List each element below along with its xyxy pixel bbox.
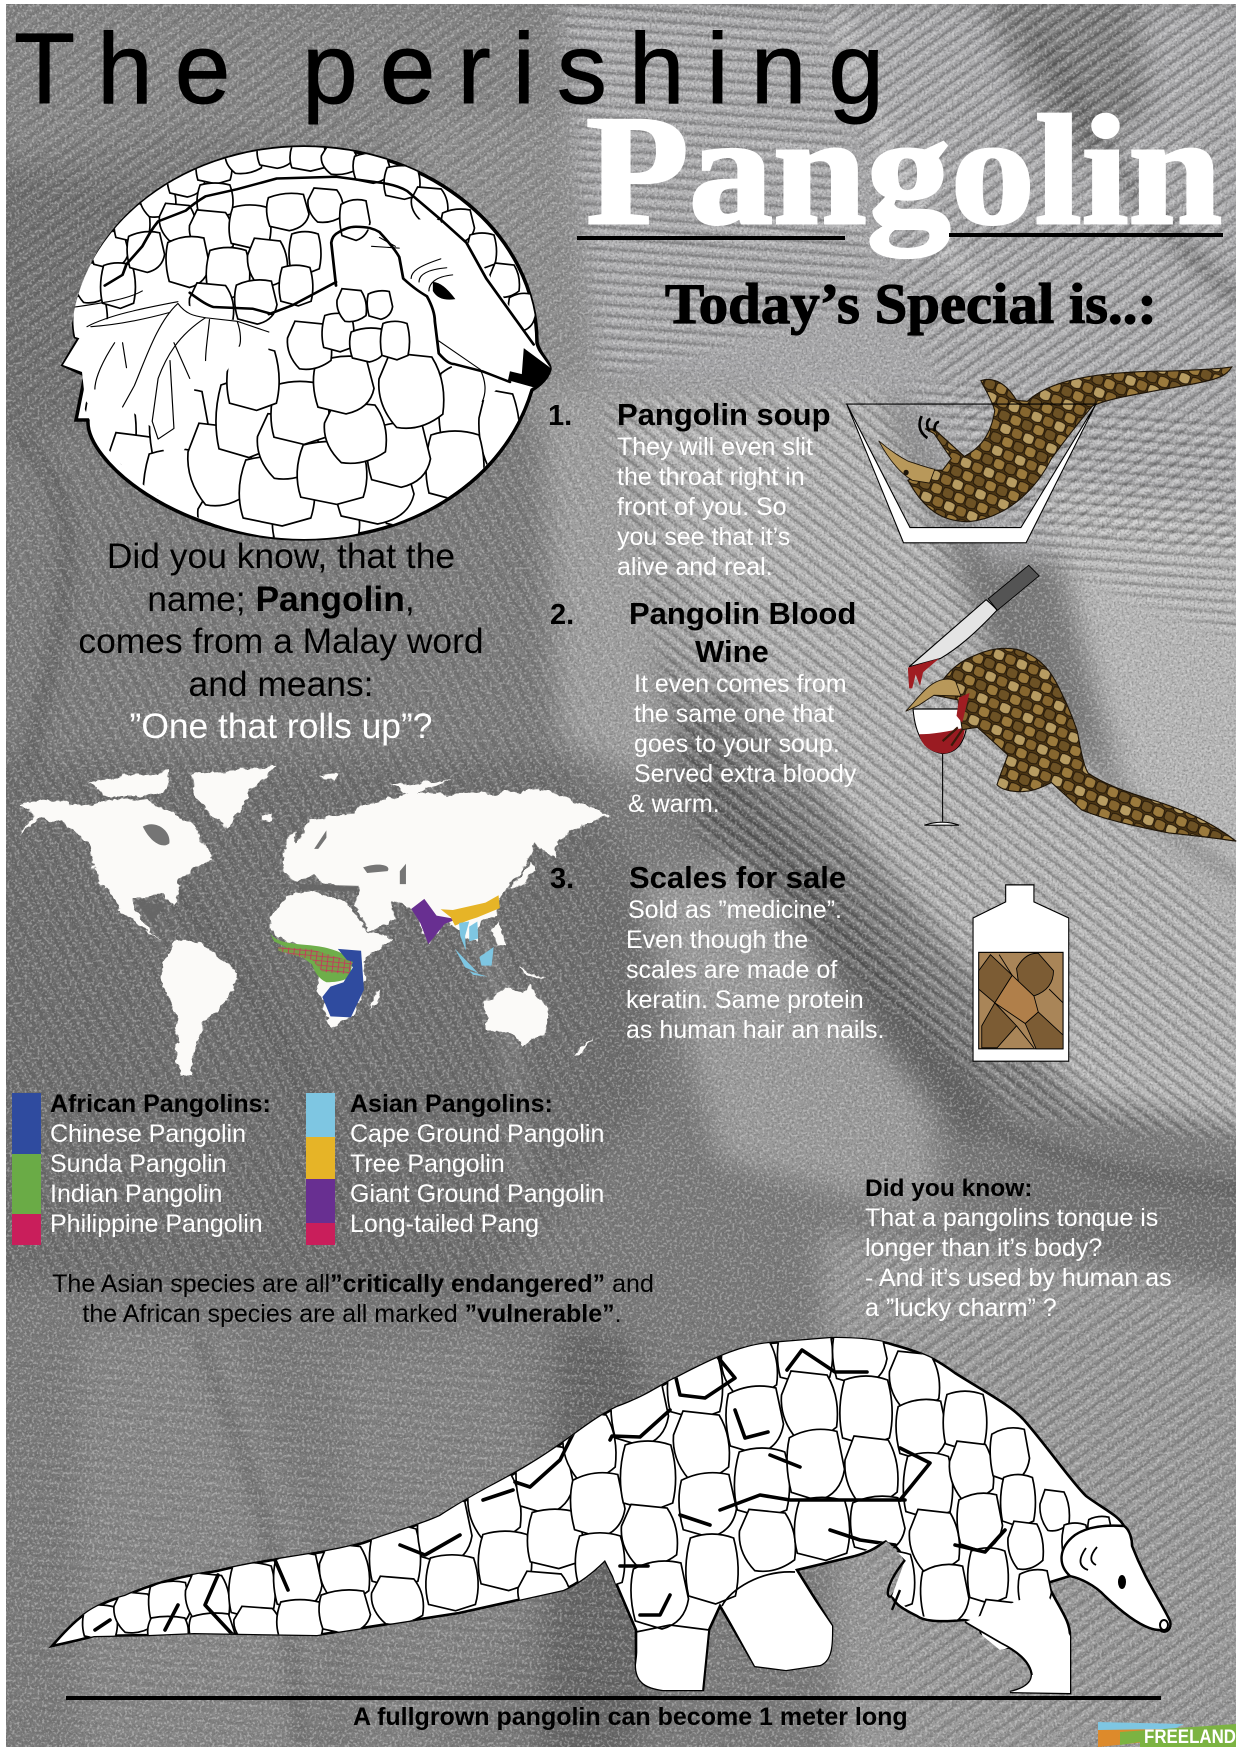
range: blue zone [322,949,364,1017]
knife [908,565,1039,688]
text: did you know, name origin: Did you know, that the [107,536,455,576]
text: did you know, tongue: - And it’s used by human as [865,1264,1172,1292]
text: did you know, name origin [78,536,484,746]
item 1: Pangolin soup: the throat right in [617,463,805,491]
scale tiles [73,140,536,553]
legs [636,1630,709,1690]
text: did you know, tongue [865,1175,1172,1322]
item 1: Pangolin soup: 1. [548,400,572,432]
heading: Today's Special: Today’s Special is..: [665,273,1157,336]
world map of pangolin range [20,766,608,1077]
logo: Freeland [1098,1722,1236,1748]
title underline right [949,233,1223,237]
legend: Asian Pangolins [306,1090,604,1245]
text: did you know, name origin: ”One that rolls up”? [130,706,432,746]
title underline left [577,236,845,240]
item 2: Pangolin Blood Wine: 2. [550,599,574,631]
illustration: rolled-up pangolin [63,140,550,553]
caption: one metre long: A fullgrown pangolin can become 1 meter long [353,1703,908,1731]
item 3: Scales for sale [550,860,884,1044]
wine glass [913,709,967,825]
text: did you know, tongue: That a pangolins tonque is [865,1204,1158,1232]
legend: African Pangolins: African Pangolins: [50,1090,271,1118]
range: purple India [411,899,457,944]
note: conservation status: The Asian species are all”critically endangered” and [52,1270,654,1298]
body scale tiles [83,1321,1112,1651]
item 2: Pangolin Blood Wine: & warm. [628,790,720,818]
item 1: Pangolin soup: alive and real. [617,553,773,581]
text: did you know, tongue: longer than it’s body? [865,1234,1102,1262]
note: conservation status: the African species are all marked ”vulnerable”. [82,1300,622,1328]
heavy scale edges [95,1345,1005,1634]
text: did you know, tongue: a ”lucky charm” ? [865,1294,1057,1322]
legend: Asian Pangolins: Tree Pangolin [350,1150,505,1178]
item 2: Pangolin Blood Wine: the same one that [634,700,834,728]
title: Pangolin: Pangolin [586,83,1222,258]
item 2: Pangolin Blood Wine [550,596,857,818]
legend: Asian Pangolins: Giant Ground Pangolin [350,1180,604,1208]
range: yellow south China [441,895,500,926]
scale bar line [66,1696,1161,1700]
icon: pangolin with knife and wine glass [906,565,1236,841]
text: did you know, name origin: name; Pangolin, [147,579,415,619]
item 3: Scales for sale: Even though the [626,926,808,954]
item 1: Pangolin soup: They will even slit [617,433,813,461]
item 1: Pangolin soup: front of you. So [617,493,787,521]
item 3: Scales for sale: Sold as ”medicine”. [628,896,842,924]
item 3: Scales for sale: 3. [550,863,574,895]
head [1062,1526,1170,1632]
text: did you know, name origin: comes from a Malay word [78,621,484,661]
item 3: Scales for sale: as human hair an nails. [626,1016,884,1044]
note: conservation status [52,1270,654,1328]
item 1: Pangolin soup [548,397,831,581]
item 3: Scales for sale: scales are made of [626,956,837,984]
icon: pangolin in soup bowl [846,367,1232,543]
legend: African Pangolins: Indian Pangolin [50,1180,222,1208]
item 3: Scales for sale: Scales for sale [629,860,846,895]
head [356,218,550,403]
legend: African Pangolins: Sunda Pangolin [50,1150,227,1178]
item 2: Pangolin Blood Wine: Served extra bloody [634,760,857,788]
continents [20,766,608,1077]
item 2: Pangolin Blood Wine: goes to your soup. [634,730,840,758]
illustration: full-size pangolin [52,1321,1170,1693]
legend: African Pangolins [12,1090,271,1245]
item 3: Scales for sale: keratin. Same protein [626,986,864,1014]
title: The perishing: The perishing [14,13,884,125]
item 1: Pangolin soup: you see that it’s [617,523,790,551]
forearm with feathered scales [63,302,269,470]
text: did you know, tongue: Did you know: [865,1175,1032,1202]
item 2: Pangolin Blood Wine: It even comes from [634,670,847,698]
legend: African Pangolins: Chinese Pangolin [50,1120,246,1148]
range: crimson hatch [278,947,353,974]
legend: Asian Pangolins: Long-tailed Pang [350,1210,539,1238]
range: green belt [268,930,353,982]
item 2: Pangolin Blood Wine: Wine [695,634,769,669]
legend: African Pangolins: Philippine Pangolin [50,1210,263,1238]
range: light blue southeast Asia [455,921,494,977]
item 1: Pangolin soup: Pangolin soup [617,397,831,432]
legend: Asian Pangolins: Cape Ground Pangolin [350,1120,604,1148]
icon: scale medicine bottle [973,885,1069,1061]
text: did you know, name origin: and means: [189,664,373,704]
legend: Asian Pangolins: Asian Pangolins: [350,1090,553,1118]
item 2: Pangolin Blood Wine: Pangolin Blood [629,596,856,631]
